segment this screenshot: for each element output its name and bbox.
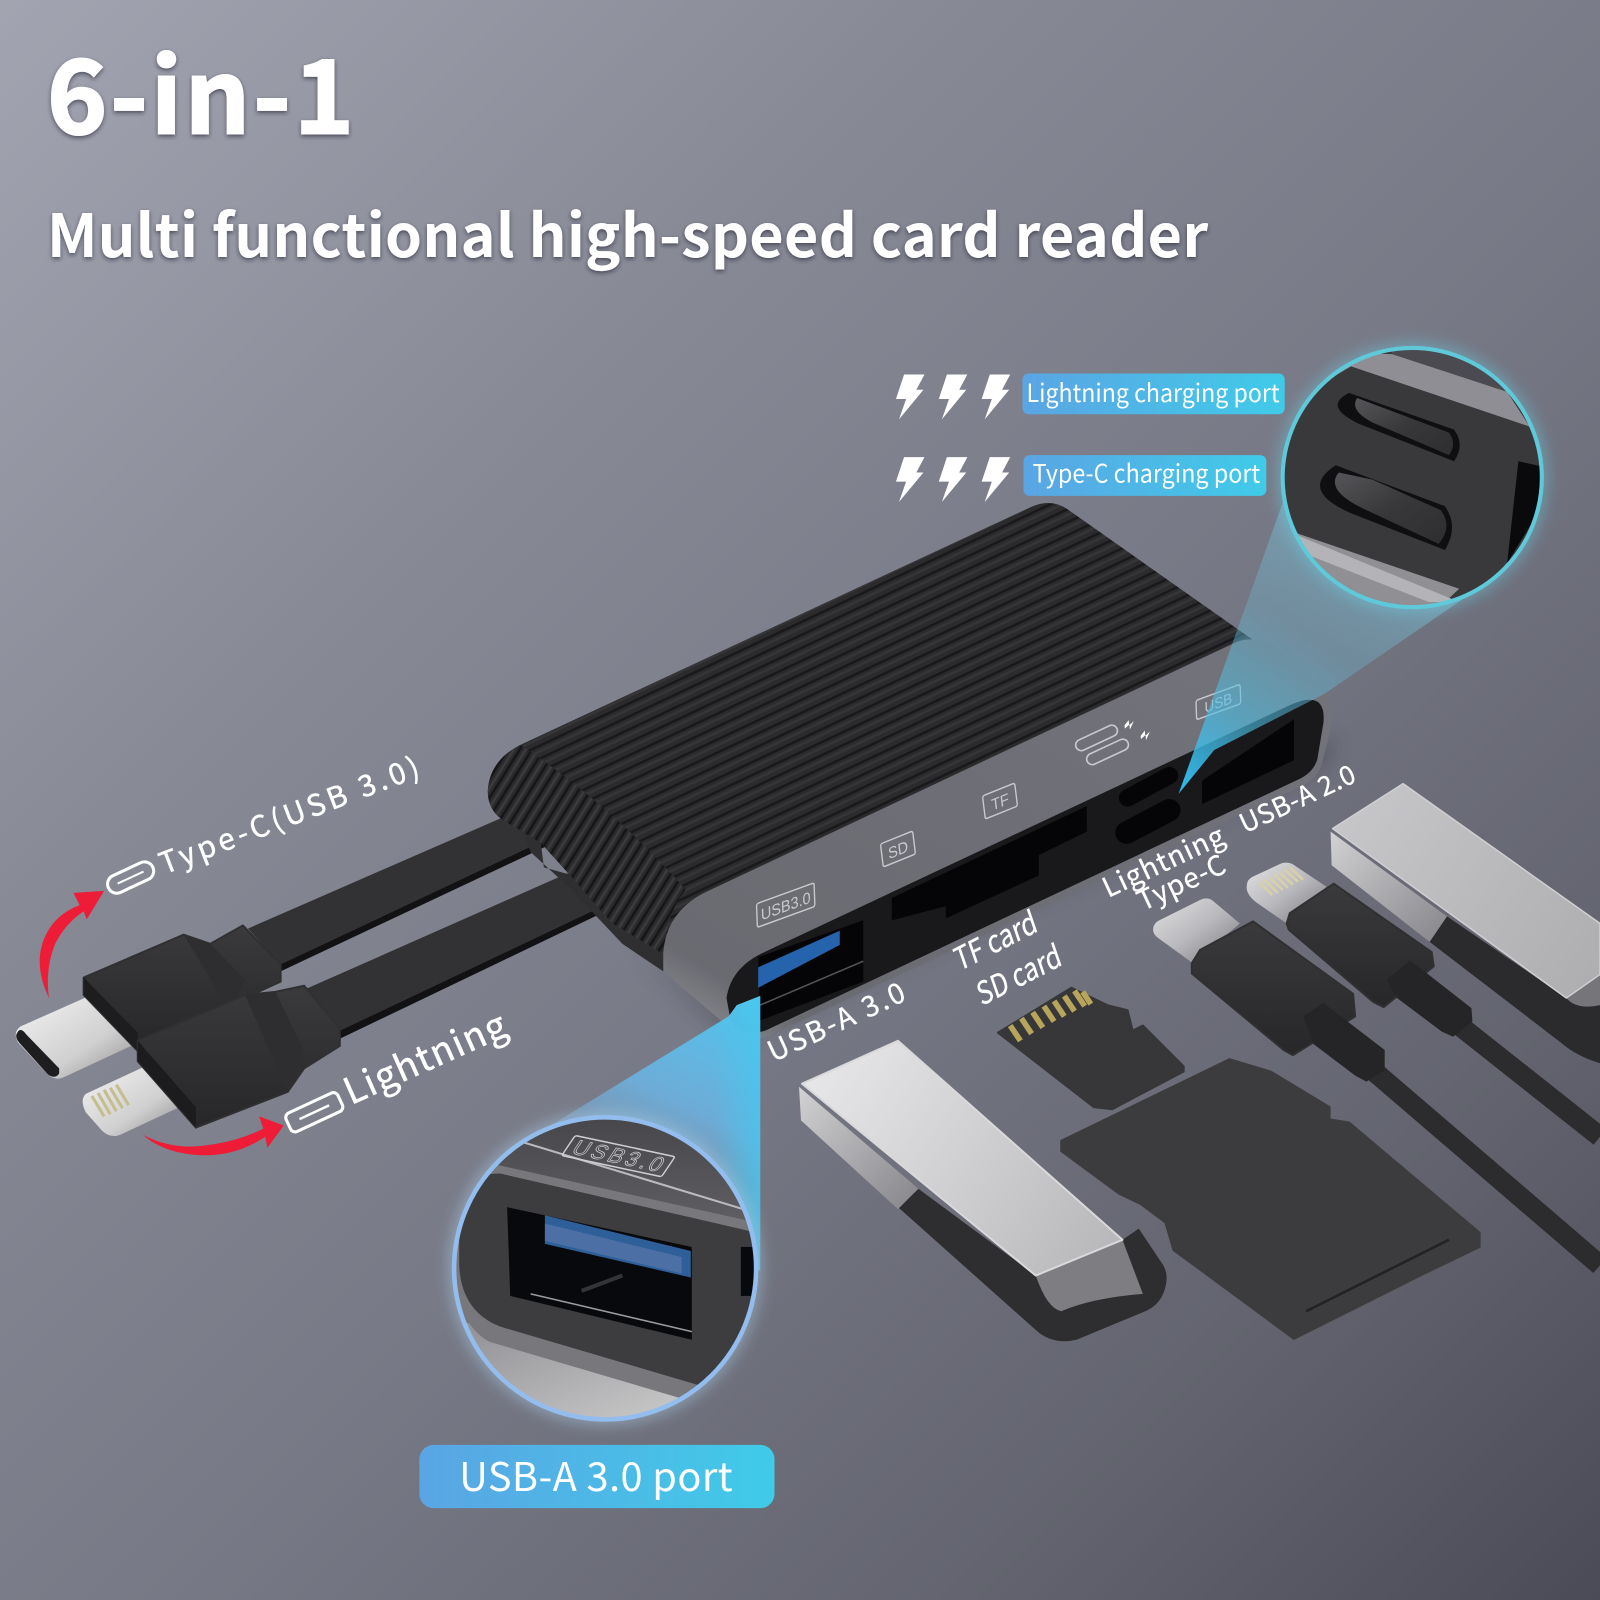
front face bbox=[727, 700, 1324, 1033]
label: usb-a 3.0 port: USB-A 3.0 port bbox=[459, 1446, 733, 1503]
sd card bbox=[1061, 1059, 1480, 1339]
label: usb-a 3.0: USB-A 3.0 bbox=[760, 971, 911, 1070]
beam edge highlight bbox=[714, 996, 760, 1270]
red arrow: type-c bbox=[40, 891, 104, 998]
flat cable: type-c bbox=[248, 816, 545, 971]
ribbed top shell bbox=[488, 503, 1257, 954]
icon: sd: SD bbox=[887, 838, 909, 863]
label: lightning charging port: Lightning charging port bbox=[1027, 374, 1280, 410]
microsd card bbox=[998, 988, 1184, 1109]
lightning plug bbox=[83, 986, 340, 1136]
callout circle: charging ports bbox=[1276, 342, 1551, 617]
type-c plug bbox=[16, 926, 281, 1079]
top dark edge bbox=[1392, 350, 1506, 392]
side end block bbox=[515, 811, 663, 971]
label: usb-a 2.0: USB-A 2.0 bbox=[1232, 753, 1361, 841]
icon: sd bbox=[880, 831, 915, 867]
icon: lightning connector bbox=[284, 1091, 344, 1134]
bottom metal band bbox=[1298, 534, 1459, 606]
usb stick left bbox=[799, 1041, 1167, 1341]
slot: lightning bbox=[1338, 393, 1460, 461]
usb stick right bbox=[1331, 784, 1600, 1063]
hub device bbox=[488, 503, 1337, 1041]
gold contacts bbox=[1259, 867, 1303, 895]
red arrow: lightning bbox=[143, 1116, 284, 1155]
label: tf card: TF card bbox=[947, 896, 1042, 980]
metal front plate bbox=[663, 639, 1332, 1039]
icon: usb bbox=[1196, 684, 1241, 720]
label: type-c charging port: Type-C charging port bbox=[1033, 455, 1261, 491]
icon: usb: USB bbox=[1204, 691, 1233, 717]
label: type-c: Type-C bbox=[1129, 843, 1231, 918]
port labels bbox=[760, 753, 1361, 1070]
adjacent slot bbox=[740, 1247, 754, 1296]
metal rim bbox=[456, 1165, 749, 1398]
sd and tf slots bbox=[892, 806, 1087, 920]
ribbed side edge bbox=[488, 745, 686, 954]
label: usb-a 3.0 port bbox=[419, 1445, 774, 1508]
gold contacts bbox=[1010, 991, 1091, 1041]
icon: tf bbox=[983, 783, 1017, 819]
icon: three bolts bbox=[896, 457, 1010, 502]
type-c charging row bbox=[896, 455, 1266, 502]
icon: usb3.0: USB3.0 bbox=[761, 889, 811, 925]
ground below device bbox=[466, 1322, 678, 1418]
top metal band bbox=[1336, 354, 1529, 426]
label: type-c usb 3.0: Type-C(USB 3.0) bbox=[152, 744, 425, 883]
title: 6-in-1 bbox=[47, 17, 354, 164]
icon: charging ports bbox=[1074, 711, 1152, 768]
front face bbox=[459, 1173, 765, 1390]
gold contacts bbox=[92, 1085, 129, 1116]
blue tongue bbox=[545, 1215, 691, 1278]
type-c cable bbox=[1153, 898, 1600, 1265]
icon: type-c connector bbox=[105, 859, 157, 896]
lightning charging row bbox=[896, 373, 1285, 419]
usb 3.0 port bbox=[758, 920, 863, 1020]
icon: usb3.0: USB3.0 bbox=[567, 1136, 670, 1176]
label: lightning: Lightning bbox=[334, 995, 514, 1115]
flat cable: lightning bbox=[304, 872, 612, 1039]
icon: usb3.0 bbox=[757, 883, 815, 927]
usb-a 2.0 port bbox=[1202, 719, 1294, 804]
slot: type-c bbox=[1320, 465, 1452, 550]
beam: usb 3.0 callout bbox=[536, 996, 760, 1270]
subtitle: Multi functional high-speed card reader bbox=[47, 189, 1208, 275]
callout circle: usb 3.0 port bbox=[448, 1111, 765, 1426]
icon: tf: TF bbox=[990, 791, 1010, 815]
label: sd card: SD card bbox=[970, 930, 1066, 1015]
lightning and type-c ports bbox=[1127, 776, 1169, 833]
usb port edge bbox=[1507, 461, 1540, 562]
beam: lightning ports callout bbox=[1179, 500, 1477, 794]
lightning cable bbox=[1247, 863, 1600, 1137]
label: lightning: Lightning bbox=[1095, 814, 1230, 905]
icon: three bolts bbox=[896, 374, 1010, 419]
hub shadow bbox=[633, 735, 1337, 1041]
usb port opening bbox=[507, 1207, 692, 1340]
